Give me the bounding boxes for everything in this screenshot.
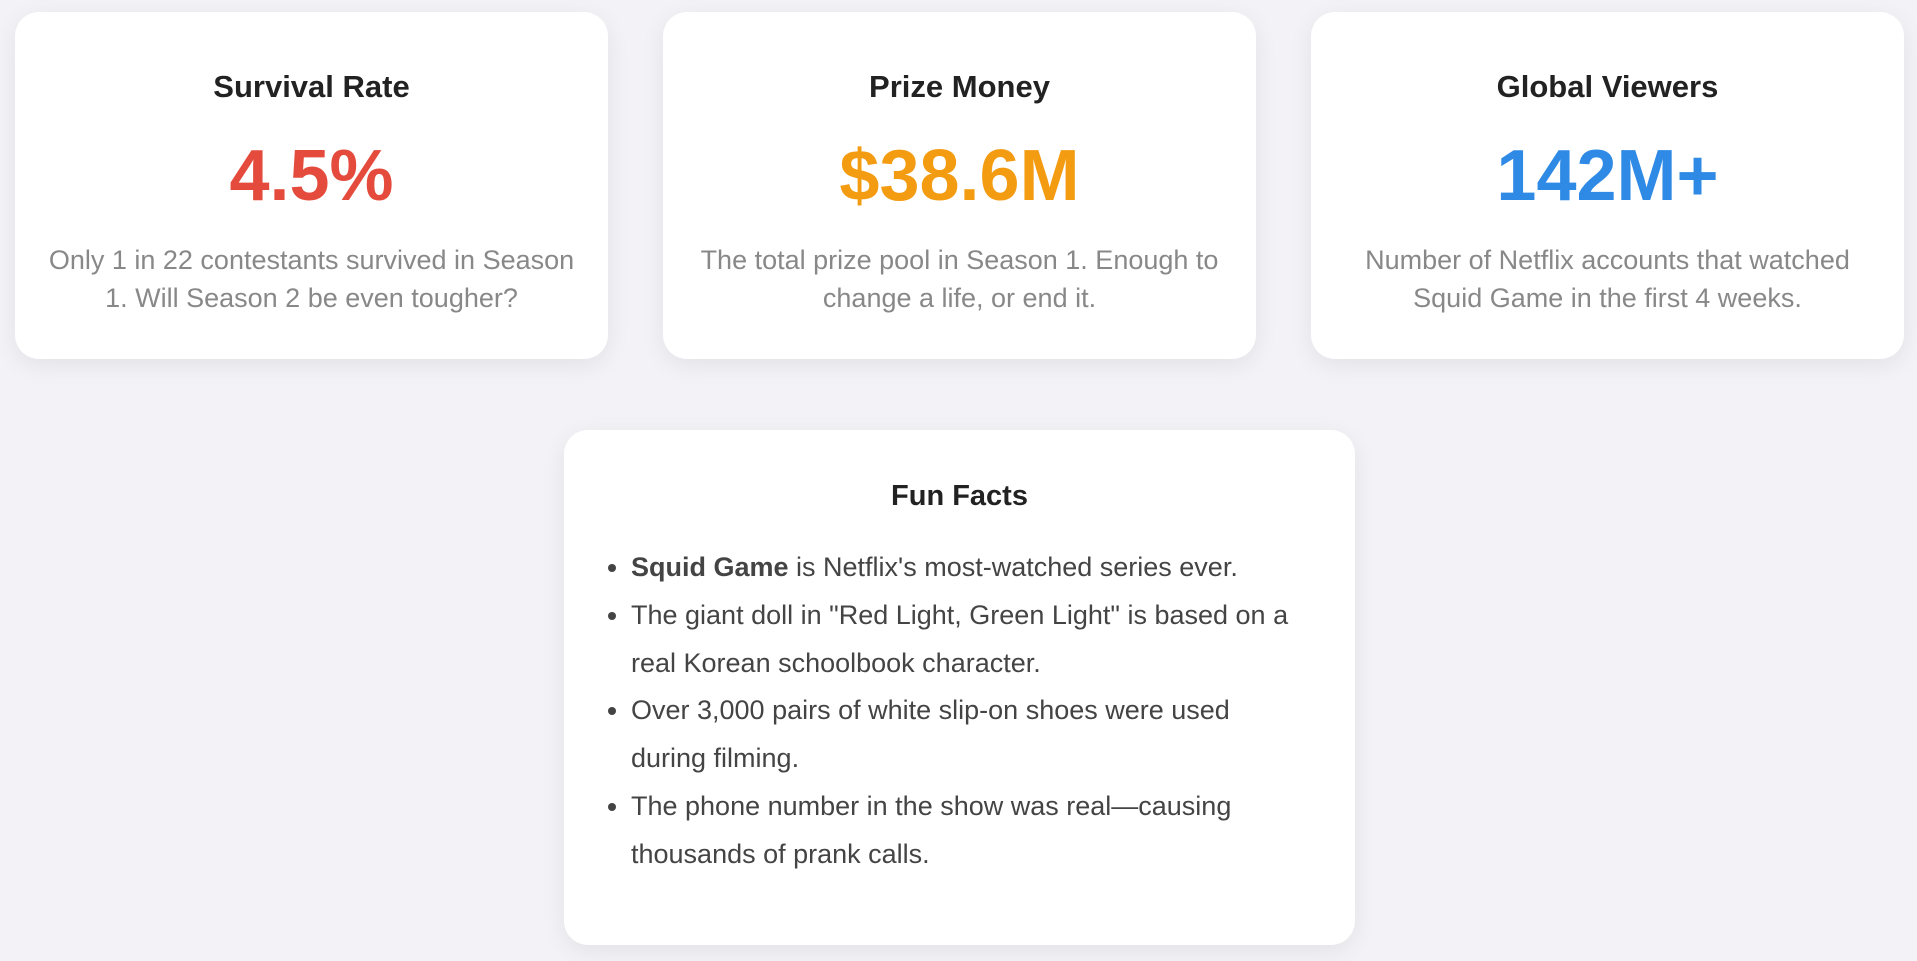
text: prize description: The total prize pool in Season 1. Enough to bbox=[701, 245, 1218, 275]
text: prize description bbox=[701, 245, 1218, 313]
card: global viewers bbox=[1311, 12, 1904, 359]
heading: fun facts: Fun Facts bbox=[891, 480, 1028, 512]
text: survival description: 1. Will Season 2 be even tougher? bbox=[105, 283, 518, 313]
heading: survival rate: Survival Rate bbox=[213, 69, 410, 104]
text: viewers description bbox=[1365, 245, 1850, 313]
text: prize description: change a life, or end it. bbox=[823, 283, 1096, 313]
list item 3 bbox=[631, 687, 1230, 783]
list item 2 bbox=[631, 592, 1288, 688]
list item 2: The giant doll in "Red Light, Green Light" is based on a bbox=[631, 600, 1288, 630]
heading: prize money: Prize Money bbox=[869, 69, 1050, 104]
list item 2: real Korean schoolbook character. bbox=[631, 648, 1041, 678]
heading: global viewers: Global Viewers bbox=[1497, 69, 1718, 104]
text: survival description bbox=[49, 245, 574, 313]
text: survival description: Only 1 in 22 contestants survived in Season bbox=[49, 245, 574, 275]
list item 3: Over 3,000 pairs of white slip-on shoes were used bbox=[631, 695, 1230, 725]
number: 142M+: 142M+ bbox=[1496, 136, 1719, 216]
text: viewers description: Number of Netflix accounts that watched bbox=[1365, 245, 1850, 275]
list item 1: Squid Game is Netflix's most-watched series ever. bbox=[631, 552, 1238, 582]
text: viewers description: Squid Game in the first 4 weeks. bbox=[1413, 283, 1802, 313]
card: prize money bbox=[663, 12, 1256, 359]
panel: fun facts bbox=[564, 430, 1355, 945]
card: survival rate bbox=[15, 12, 608, 359]
list item 4: thousands of prank calls. bbox=[631, 839, 930, 869]
number: $38.6M: $38.6M bbox=[839, 136, 1080, 216]
list item 3: during filming. bbox=[631, 743, 799, 773]
number: 4.5%: 4.5% bbox=[229, 136, 394, 216]
list item 4: The phone number in the show was real—causing bbox=[631, 791, 1231, 821]
list item 4 bbox=[631, 783, 1231, 879]
